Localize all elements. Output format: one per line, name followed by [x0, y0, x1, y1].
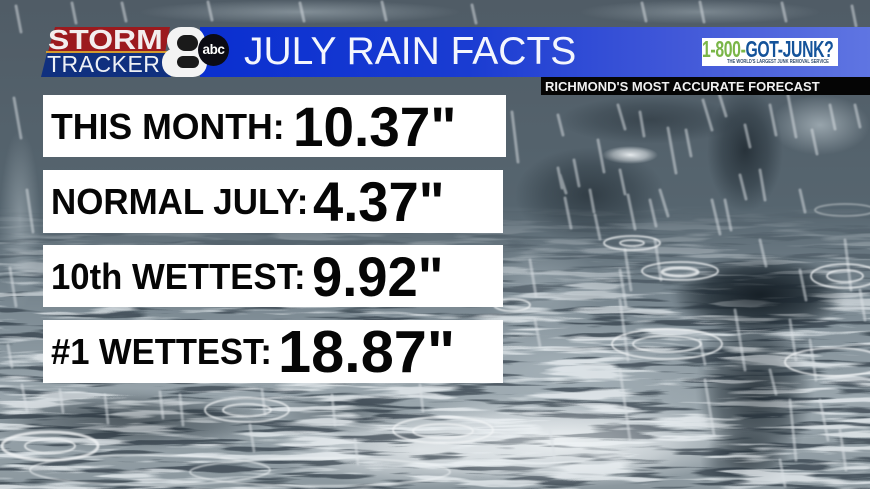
label: THIS MONTH: — [51, 106, 285, 147]
value: 4.37" — [313, 170, 444, 233]
panel: this month — [43, 95, 506, 157]
water ripple texture — [0, 214, 870, 489]
navy tracker block — [41, 53, 171, 77]
value: 10.37" — [293, 95, 456, 157]
big 8 — [162, 27, 207, 77]
storm text: STORM — [48, 24, 163, 55]
abc bug — [198, 34, 229, 66]
tagline strip — [541, 77, 870, 95]
panel: #1 wettest — [43, 320, 503, 383]
tonal overlays above ripples — [20, 257, 845, 485]
value: 9.92" — [312, 245, 443, 307]
label: 10th WETTEST: — [51, 256, 306, 297]
panel: 10th wettest — [43, 245, 503, 307]
blue title bar — [200, 27, 870, 77]
sponsor tagline: THE WORLD'S LARGEST JUNK REMOVAL SERVICE — [727, 59, 829, 65]
gold rule — [46, 51, 168, 53]
abc bug: abc — [202, 42, 225, 57]
title: JULY RAIN FACTS — [244, 30, 576, 73]
tagline strip: RICHMOND'S MOST ACCURATE FORECAST — [545, 79, 820, 94]
logo: Storm Tracker 8 abc — [41, 24, 229, 77]
sponsor logo — [702, 38, 838, 66]
panel: normal july — [43, 170, 503, 233]
red storm block — [48, 27, 170, 52]
label: #1 WETTEST: — [51, 331, 272, 372]
header banner — [41, 24, 870, 95]
label: NORMAL JULY: — [51, 181, 308, 222]
puddle ripples — [2, 204, 870, 486]
tracker text: TRACKER — [47, 51, 160, 77]
